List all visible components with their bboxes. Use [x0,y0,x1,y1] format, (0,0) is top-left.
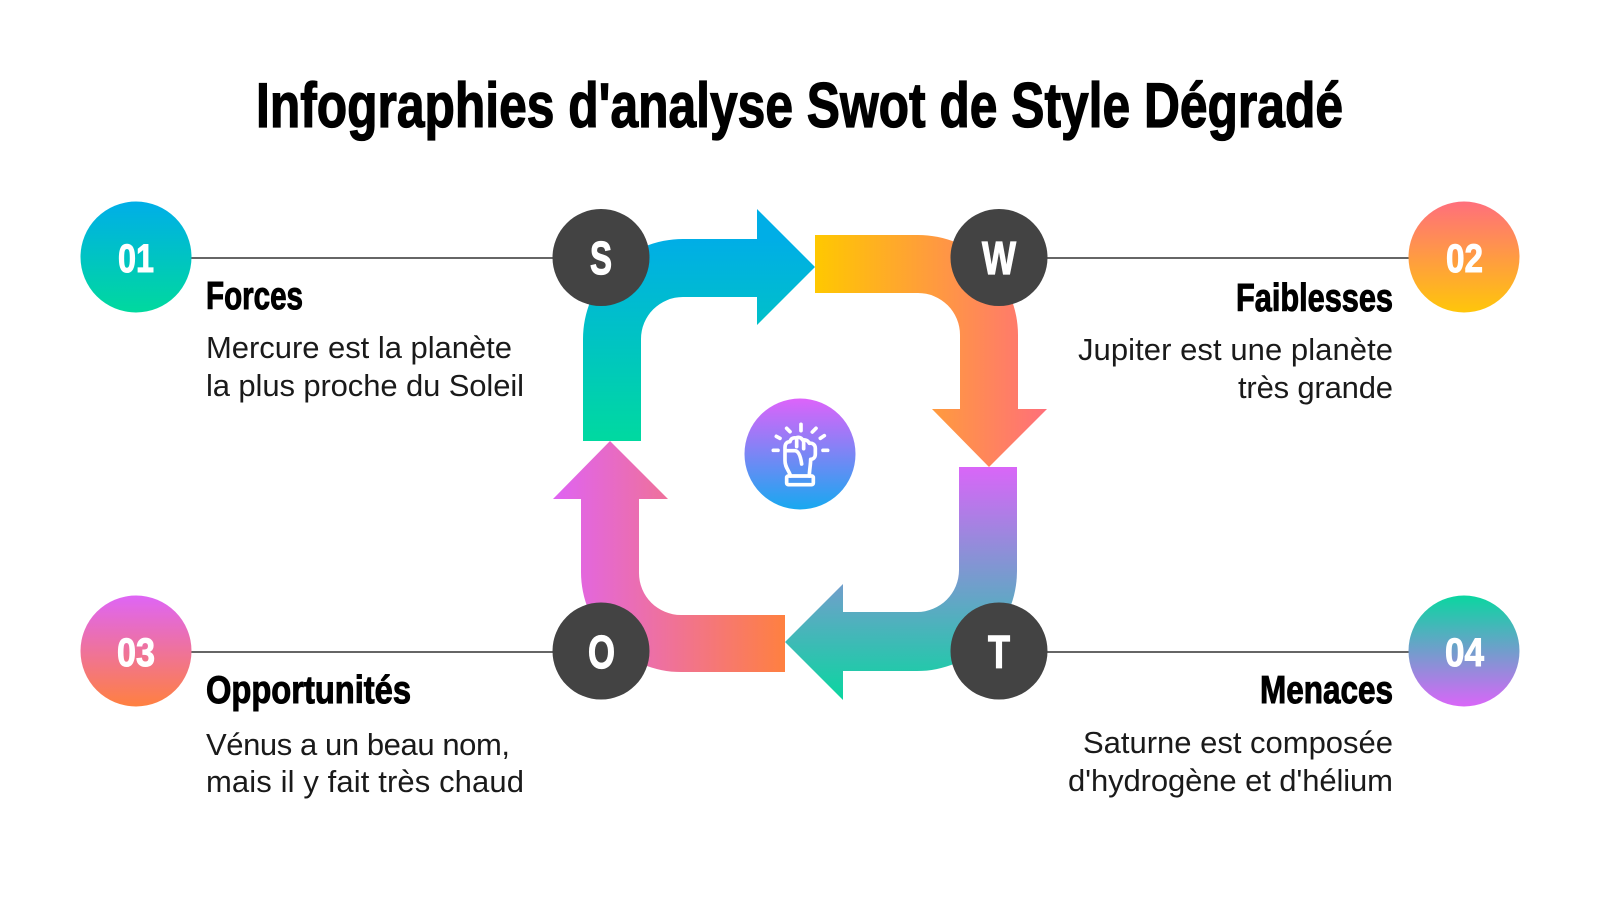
heading: Opportunités: Opportunités [206,669,411,712]
text: Faiblesses description: Jupiter est une planète [1078,332,1393,367]
arrow: opportunities (pink to orange, pointing up) [553,441,785,672]
connector line: 01 to S [190,257,556,259]
number badge 02: 02 [1446,237,1483,281]
letter badge S [552,209,650,306]
arrow: weaknesses (orange, pointing down) [815,235,1047,467]
number badge 04: 04 [1445,631,1485,675]
heading: Forces: Forces [206,275,303,318]
heading: Menaces: Menaces [1260,669,1393,712]
text: Faiblesses description [1078,332,1393,405]
text: Menaces description: Saturne est composée [1083,725,1393,760]
letter badge T: T [988,626,1010,678]
text: Opportunités description [206,727,524,799]
heading: Faiblesses: Faiblesses [1236,277,1393,320]
panel: 04 Menaces [1068,596,1520,798]
text: Faiblesses description: très grande [1238,370,1393,405]
number badge 02 [1408,202,1520,312]
letter badge O: O [588,626,615,678]
text: Opportunités description: Vénus a un beau nom, [206,727,510,762]
panel: 02 Faiblesses [1078,202,1520,405]
connector line: T to 04 [1045,651,1412,653]
connector line: 03 to O [190,651,556,653]
number badge 01 [80,202,192,312]
text: Forces description: la plus proche du Soleil [206,368,524,403]
number badge 03: 03 [117,631,155,675]
text: Forces description [206,330,524,403]
panel: 03 Opportunités [80,596,524,799]
icon: raised fist with rays [773,424,828,485]
text: Menaces description: d'hydrogène et d'hélium [1068,763,1393,798]
text: Menaces description [1068,725,1393,798]
text: Opportunités description: mais il y fait très chaud [206,764,524,799]
letter badge O [552,602,650,700]
arrow: threats (purple to green, pointing left) [785,467,1017,700]
number badge 01: 01 [118,237,154,281]
arrow: strengths (teal, pointing right) [583,209,815,441]
letter badge W [950,209,1048,306]
number badge 03 [80,596,192,706]
letter badge T [950,602,1048,700]
text: Forces description: Mercure est la planète [206,330,512,365]
title: Infographies d'analyse Swot de Style Dégradé [256,71,1343,141]
letter badge S: S [590,232,612,284]
number badge 04 [1408,596,1520,706]
letter badge W: W [982,232,1016,284]
panel: 01 Forces [80,202,524,403]
center badge with fist icon [744,398,856,510]
connector line: W to 02 [1045,257,1412,259]
